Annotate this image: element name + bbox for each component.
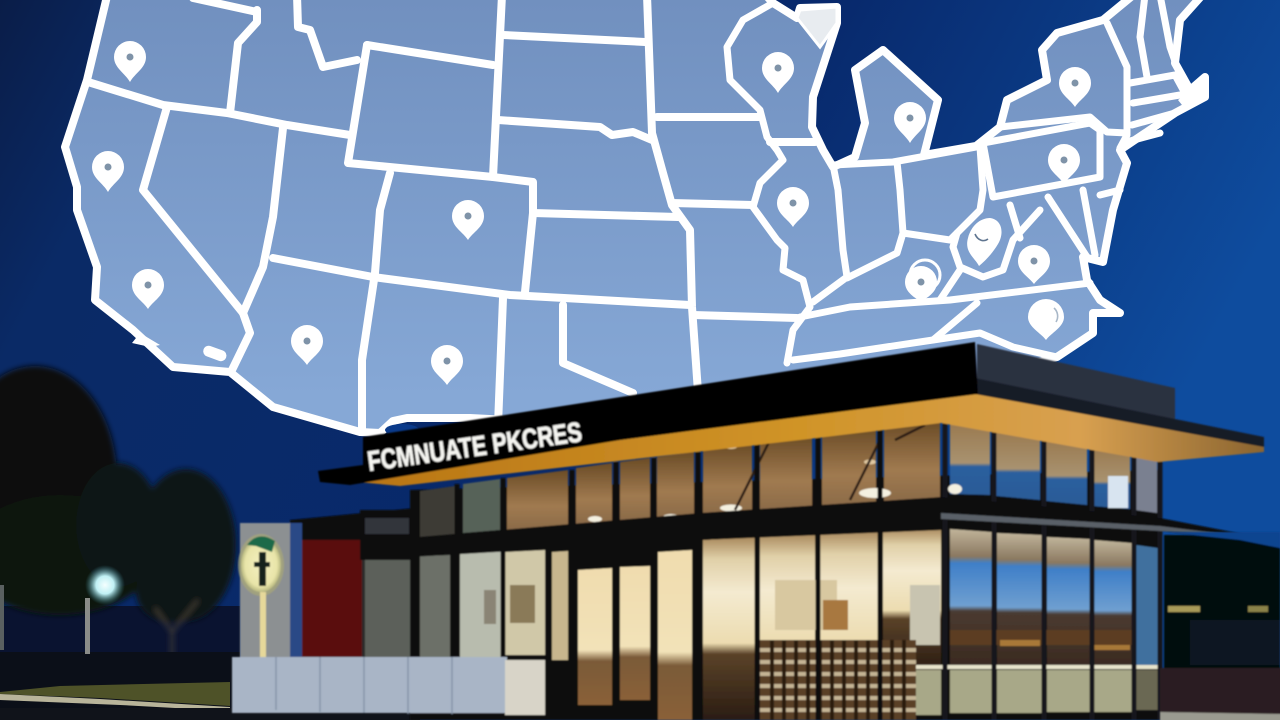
sign tower — [238, 523, 302, 657]
storefront building — [232, 342, 1264, 720]
location pin: Colorado — [452, 200, 484, 240]
ceiling lights — [588, 445, 962, 522]
grey side window — [362, 558, 412, 658]
planter wall — [232, 657, 545, 715]
canopy soffit — [347, 393, 1264, 486]
island off the southern California coast — [202, 344, 228, 363]
black roof fascia — [318, 342, 978, 485]
storefront base — [410, 470, 1160, 720]
right roof fascia — [975, 344, 1264, 447]
coast spur — [132, 333, 160, 347]
location pin: Michigan — [894, 102, 926, 143]
tables and seating on the right — [950, 630, 1135, 650]
olive lower panels — [880, 665, 1160, 715]
circular logo sign — [238, 534, 284, 657]
map of the United States — [65, 0, 1205, 433]
location pin: Pennsylvania — [1048, 144, 1080, 184]
display shelves — [760, 640, 916, 720]
red wall — [302, 540, 362, 657]
horizontal band between floors — [360, 497, 1248, 560]
map silhouette — [65, 0, 1205, 433]
mullions — [417, 422, 1160, 720]
location pin: northern California — [92, 151, 124, 192]
location pin: Arizona — [291, 325, 323, 365]
back annex dark roof band — [290, 508, 415, 545]
location pin: New Mexico — [431, 345, 463, 385]
location pin: Virginia — [1018, 245, 1050, 284]
state borders — [88, 0, 815, 432]
upper clerestory windows — [420, 422, 1157, 537]
location pin: West Virginia — [967, 218, 1002, 266]
lower storefront glass — [420, 528, 1158, 720]
ground and road on the left — [0, 652, 420, 720]
location pin: New York — [1059, 67, 1091, 107]
trees on the left — [0, 366, 236, 685]
location pin: Kentucky — [905, 260, 940, 302]
cape hook — [1178, 80, 1205, 110]
location pin: Wisconsin — [762, 52, 794, 93]
dark treeline and road on the right — [1160, 532, 1280, 720]
storefront sign text: FCMNUATE PKCRES — [366, 416, 584, 477]
eastern state borders — [727, 0, 1187, 363]
small sky patch under the coast bump — [385, 424, 419, 436]
location pin: Illinois — [777, 187, 809, 227]
street lamp — [0, 565, 125, 654]
upper peninsula — [797, 7, 837, 47]
location pin: southern California — [132, 269, 164, 309]
dark distant ground band — [0, 606, 240, 652]
location pin: Washington — [114, 41, 146, 82]
location pin: North Carolina — [1028, 299, 1064, 340]
